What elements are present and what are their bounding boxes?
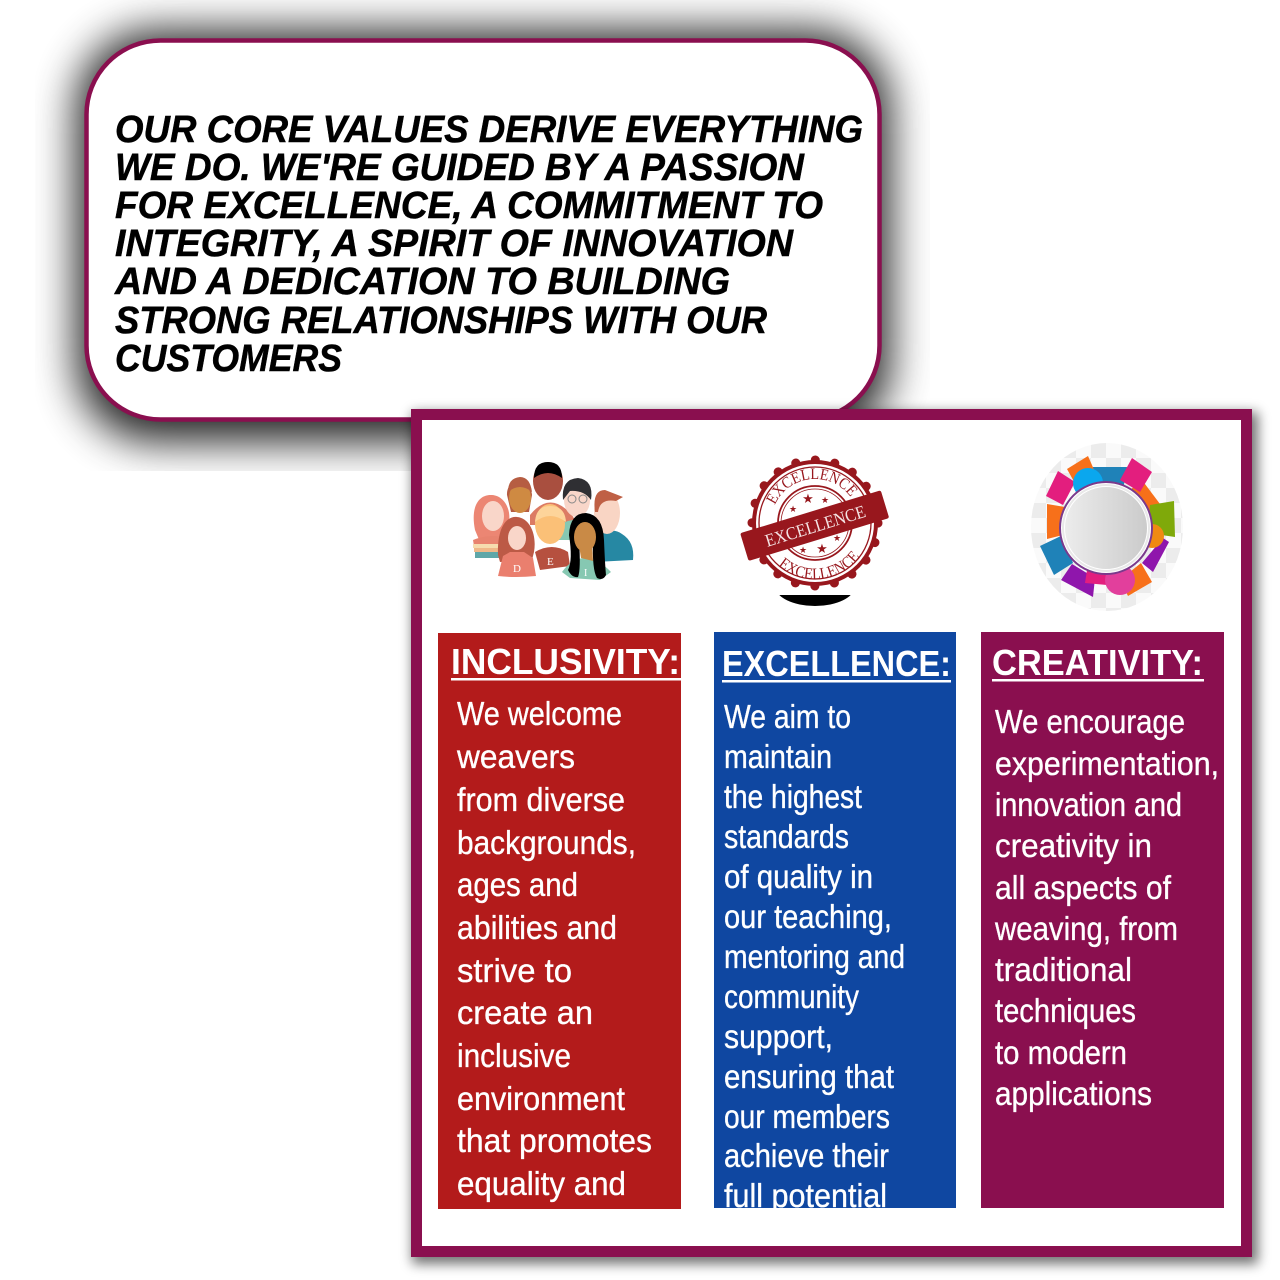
creativity description: experimentation, [995, 745, 1219, 782]
creativity description: to modern [995, 1034, 1127, 1071]
heading: creativity: CREATIVITY: [992, 642, 1203, 683]
icon: excellence stamp [740, 456, 889, 606]
panel: core values statement card [76, 30, 890, 442]
panel: creativity [981, 632, 1224, 1208]
creativity description: innovation and [995, 786, 1182, 823]
icon: diverse group of people: I [584, 568, 587, 579]
creativity description: applications [995, 1075, 1152, 1112]
excellence description: the highest [724, 778, 862, 815]
core values statement text: STRONG RELATIONSHIPS WITH OUR [115, 300, 768, 342]
icon: excellence stamp: EXCELLENCE [779, 550, 859, 578]
excellence description: of quality in [724, 858, 873, 895]
heading: excellence: EXCELLENCE: [722, 643, 951, 684]
heading: inclusivity: INCLUSIVITY: [451, 641, 680, 682]
panel: inclusivity [438, 633, 681, 1209]
creativity description: techniques [995, 992, 1136, 1029]
inclusivity description: backgrounds, [457, 824, 636, 861]
icon: excellence stamp: ★ [789, 505, 797, 515]
core values statement text: WE DO. WE'RE GUIDED BY A PASSION [115, 147, 806, 189]
inclusivity description: We welcome [457, 695, 622, 732]
icon: diverse group of people [473, 462, 633, 580]
inclusivity description: equality and [457, 1165, 626, 1202]
icon: excellence stamp: ★ [833, 534, 841, 544]
core values statement text: INTEGRITY, A SPIRIT OF INNOVATION [115, 223, 795, 265]
icon: colourful creativity wheel [1031, 443, 1183, 611]
inclusivity description: from diverse [457, 781, 625, 818]
creativity description: weaving, from [994, 910, 1178, 947]
creativity description: all aspects of [995, 869, 1172, 906]
panel: values frame [403, 403, 1267, 1273]
excellence description: We aim to [724, 698, 851, 735]
inclusivity description: weavers [456, 738, 575, 775]
icon: excellence stamp: EXCELLENCE [763, 501, 868, 551]
creativity description: traditional [995, 951, 1132, 988]
icon: excellence stamp: ★ [799, 546, 807, 556]
core values statement text: AND A DEDICATION TO BUILDING [114, 261, 730, 303]
panel: excellence [714, 632, 956, 1214]
core values statement text: FOR EXCELLENCE, A COMMITMENT TO [115, 185, 823, 227]
excellence description: ensuring that [724, 1058, 894, 1095]
creativity description: We encourage [995, 703, 1185, 740]
inclusivity description: abilities and [457, 909, 617, 946]
inclusivity description [456, 695, 652, 1202]
excellence description: standards [724, 818, 849, 855]
inclusivity description: ages and [457, 866, 578, 903]
inclusivity description: that promotes [457, 1122, 652, 1159]
excellence description: full potential [724, 1177, 887, 1214]
inclusivity description: environment [457, 1080, 625, 1117]
excellence description: support, [724, 1018, 833, 1055]
excellence description: community [724, 978, 859, 1015]
inclusivity description: strive to [457, 952, 572, 989]
icon: excellence stamp: ★ [821, 496, 829, 506]
excellence description: our teaching, [724, 898, 892, 935]
inclusivity description: create an [457, 994, 593, 1031]
core values statement text [114, 109, 863, 380]
icon: excellence stamp: ★ [816, 542, 828, 557]
core values statement text: OUR CORE VALUES DERIVE EVERYTHING [115, 109, 863, 151]
excellence description: mentoring and [724, 938, 905, 975]
icon: excellence stamp: ★ [802, 492, 814, 507]
creativity description: creativity in [995, 827, 1152, 864]
creativity description [994, 703, 1219, 1112]
excellence description: our members [724, 1098, 890, 1135]
icon: diverse group of people: D [513, 563, 521, 575]
excellence description: maintain [724, 738, 832, 775]
icon: excellence stamp: EXCELLENCE [766, 468, 858, 505]
core values statement text: CUSTOMERS [115, 338, 342, 380]
icon: diverse group of people: E [547, 556, 554, 568]
inclusivity description: inclusive [457, 1037, 571, 1074]
excellence description [724, 698, 905, 1214]
excellence description: achieve their [724, 1137, 889, 1174]
